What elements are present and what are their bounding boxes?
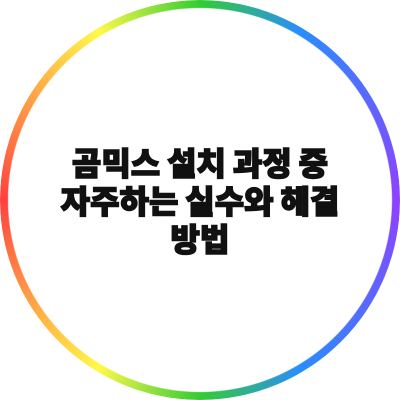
- title: 자주하는 실수와 해결: [61, 184, 339, 220]
- title: [60, 146, 339, 258]
- title: 곰믹스 설치 과정 중: [72, 146, 328, 182]
- title: 방법: [171, 222, 229, 258]
